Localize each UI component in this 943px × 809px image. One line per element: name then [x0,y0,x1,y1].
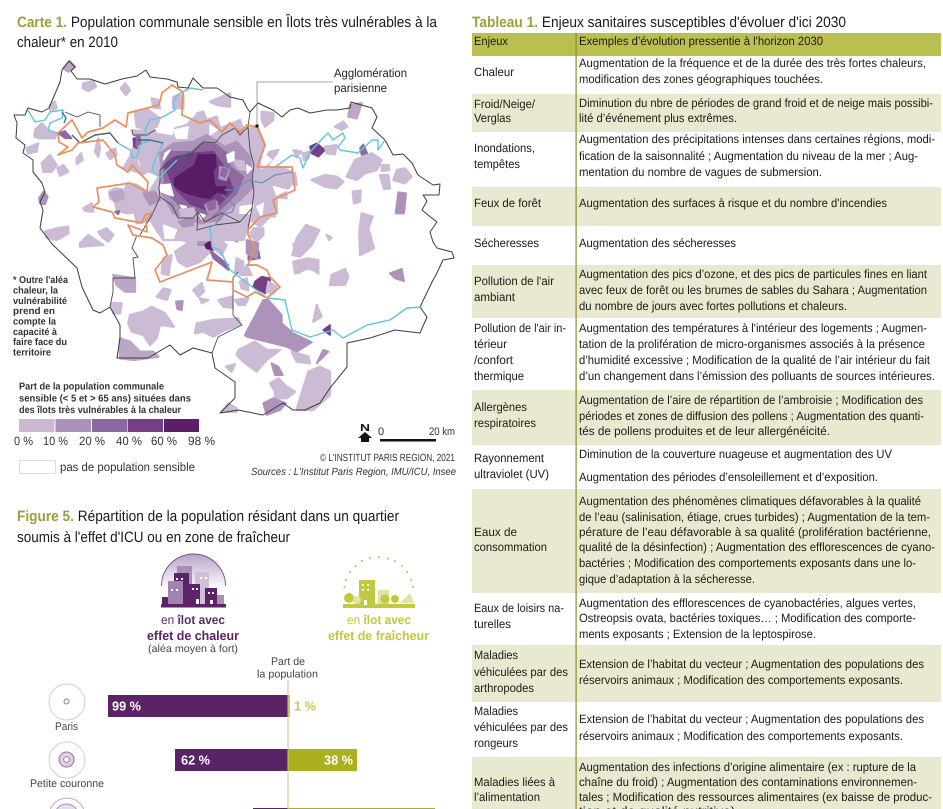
map: south communes [112,235,330,415]
row: Allergènes [474,393,924,438]
row: Petite couronne [30,742,357,790]
row: Paris [49,684,316,733]
source credit: Sources : L'Institut Paris Region, IMU/ICU, Insee [251,467,456,478]
row: Eaux de consommation: Augmentation des phénomènes climatiques défavorables à la qualité [579,494,921,508]
row: Pollution de l'air intérieur: térieur [474,337,507,351]
row: Maladies rongeurs [474,704,924,750]
row: Maladies arthropodes: véhiculées par des [474,665,568,679]
row: Chaleur [474,56,926,86]
row: Eaux de consommation: de l’eau (salinisation, étiage, crues turbides) ; Augmentation de la tem- [579,510,930,524]
row: Pollution de l'air intérieur: thermique [474,369,524,383]
row: Eaux de loisirs [474,596,916,641]
row: Maladies alimentation: l’alimentation [474,790,540,804]
row: Maladies arthropodes [474,648,924,695]
row: Froid: Froid/Neige/ [474,97,536,111]
map: Île-de-France vulnerability choropleth [14,61,454,415]
legend: choropleth classes: sensible (< 5 et > 65 ans) situées dans [19,394,191,404]
axis label: la population [257,668,318,680]
label: cool column: en îlot avec [347,613,411,627]
row: Maladies arthropodes: Extension de l’habitat du vecteur ; Augmentation des populations des [579,657,924,671]
row: Eaux de consommation: Eaux de [474,525,517,539]
row: Inondations [474,132,935,179]
footnote: vulnerability definition: * Outre l'aléa [13,275,68,286]
row: Chaleur: modification des zones géographiques touchées. [579,72,823,86]
row: Eaux de consommation: pérature de l’eau défavorable à sa qualité (prolifération bactérienne, [579,525,931,539]
row: Rayonnement UV: Diminution de la couverture nuageuse et augmentation des UV [579,447,892,461]
row: Pollution de l'air intérieur: /confort [474,353,514,367]
map: agglomeration leader and label [256,66,407,128]
map: agglomeration leader and label: parisienne [334,81,387,95]
footnote: vulnerability definition [13,275,68,358]
icon: north arrow and scale bar: N [360,423,370,434]
icon: heat city [161,554,226,608]
row: Pollution de l'air ambiant: du nombre de jours avec fortes pollutions et chaleurs. [579,299,847,313]
row: Allergènes: Augmentation de l’aire de répartition de l’ambroisie ; Modification des [579,393,923,407]
row: Sécheresses [474,236,736,250]
row: Maladies alimentation [474,760,932,809]
row: Maladies arthropodes: arthropodes [474,681,534,695]
row: Eaux de consommation: gique d’adaptation à la sécheresse. [579,572,755,586]
heading: Carte 1: chaleur* en 2010 [17,34,118,51]
table row backgrounds [472,33,941,809]
row: Pollution de l'air ambiant: Augmentation des pics d’ozone, et des pics de particules fines en liant [579,267,928,281]
footnote: vulnerability definition: territoire [13,348,52,358]
label: heat column: en îlot avec [161,613,225,627]
row: Eaux de loisirs: turelles [474,617,511,631]
table: Enjeux sanitaires [472,33,941,809]
row: Froid: lité d’événement plus extrêmes. [579,111,737,125]
map: agglomeration boundary [58,85,295,298]
row: Eaux de loisirs: Eaux de loisirs na- [474,601,564,615]
row: Petite couronne: 38 % [324,752,353,768]
legend: choropleth classes: 98 % [188,434,215,448]
row: Pollution de l'air ambiant: Pollution de l'air [474,274,554,288]
source credit: © L'INSTITUT PARIS REGION, 2021 [320,453,455,464]
row: Allergènes: respiratoires [474,416,536,430]
map: east communes [240,103,412,285]
icon: north arrow and scale bar: 20 km [429,426,455,438]
row: Pollution de l'air ambiant [474,267,928,313]
table header: Enjeux [474,34,508,48]
heading: Carte 1 [17,13,438,51]
footnote: vulnerability definition: prend en [13,306,55,317]
legend: choropleth classes [14,382,215,474]
row: Maladies alimentation: Augmentation des infections d’origine alimentaire (ex : rupture de la [579,760,916,774]
row: Eaux de consommation [474,494,935,586]
row: Rayonnement UV: ultraviolet (UV) [474,467,549,481]
legend: choropleth classes: 20 % [79,434,105,448]
axis label [257,656,318,680]
row: Pollution de l'air ambiant: avec feux de forêt ou les brumes de sables du Sahara ; Augmentation [579,283,927,297]
legend: choropleth classes: 10 % [43,434,68,448]
row: Maladies alimentation: tales ; Modification des ressources alimentaires (ex baisse de produc- [579,790,932,804]
source credit [251,453,456,478]
row: Paris: 1 % [294,698,316,714]
map: central communes around Paris [132,113,290,240]
legend: choropleth classes: 40 % [116,434,142,448]
row: Feux de forêt: Feux de forêt [474,196,542,210]
row: Petite couronne: Petite couronne [30,778,104,790]
map: rivers [28,88,422,338]
row: Sécheresses: Sécheresses [474,236,539,250]
row: Pollution de l'air intérieur: d’humidité excessive ; Modification de la qualité de l’air intérieur du fait [579,353,931,367]
chart: share of population bars [30,656,435,809]
row: Eaux de loisirs: ments exposants ; Extension de la leptospirose. [579,627,816,641]
row: Feux de forêt: Augmentation des surfaces à risque et du nombre d'incendies [579,196,887,210]
row: Rayonnement UV: Augmentation des périodes d’ensoleillement et d’exposition. [579,470,878,484]
row: Pollution de l'air intérieur: Pollution de l'air in- [474,321,566,335]
heading: Figure 5: Figure 5. Répartition de la population résidant dans un quartier [17,508,399,525]
row: Eaux de loisirs: Ostreopsis ovata, bactéries toxiques… ; Modification des comporte- [579,611,916,625]
footnote: vulnerability definition: capacité à [13,327,58,338]
footnote: vulnerability definition: compte la [13,316,57,328]
row: Inondations: tempêtes [474,157,520,171]
icon: north arrow and scale bar: 0 [378,426,384,438]
label: cool column [328,613,429,643]
row: Maladies alimentation: Maladies liées à [474,775,555,789]
row: Petite couronne: 62 % [181,752,210,768]
heading: Figure 5 [17,508,399,546]
row: Maladies rongeurs: véhiculées par des [474,720,568,734]
footnote: vulnerability definition: vulnérabilité [13,296,68,307]
icon: cool neighbourhood [343,556,415,608]
row: Maladies rongeurs: rongeurs [474,736,518,750]
legend: choropleth classes: Part de la population communale [19,382,164,392]
row: Eaux de loisirs: Augmentation des efflorescences de cyanobactéries, algues vertes, [579,596,916,610]
icon: north arrow and scale bar [358,423,455,442]
label: heat column [147,613,239,655]
row: Rayonnement UV [474,447,892,484]
row: Pollution de l'air intérieur: Augmentation des températures à l'intérieur des logements ; Augmen- [579,321,927,335]
table header: Exemples d’évolution pressentie à l'horizon 2030 [579,34,823,48]
row: Eaux de consommation: bactéries ; Modification des comportements exposants dans une lo- [579,556,916,570]
row: Inondations: mentation du nombre de vagues de submersion. [579,165,822,179]
row: Grande couronne (cropped) [49,798,435,809]
map: agglomeration leader and label: Agglomération [334,66,407,80]
label: heat column: (aléa moyen à fort) [148,643,238,655]
row: Paris: Paris [55,721,78,733]
row: Maladies rongeurs: Maladies [474,704,518,718]
legend: choropleth classes: des îlots très vulnérables à la chaleur [19,405,181,416]
row: Paris: 99 % [112,698,141,714]
row: Eaux de consommation: consommation [474,540,547,554]
row: Allergènes: tés de pollens produites et de leur allergénéicité. [579,424,830,438]
legend: choropleth classes: 0 % [14,434,33,448]
row: Maladies arthropodes: réservoirs animaux ; Modification des comportements exposants. [579,673,903,687]
row: Pollution de l'air intérieur [474,321,935,383]
legend: choropleth classes: 60 % [151,434,177,448]
row: Allergènes: Allergènes [474,400,527,414]
heading: Tableau 1: Tableau 1. Enjeux sanitaires susceptibles d'évoluer d'ici 2030 [472,14,846,31]
row: Pollution de l'air intérieur: tation de la prolifération de micro-organismes associés à la présence [579,337,925,351]
row: Maladies arthropodes: Maladies [474,648,518,662]
heading: Figure 5: soumis à l'effet d'ICU ou en zone de fraîcheur [17,529,290,546]
row: Inondations: Inondations, [474,141,535,155]
row: Maladies rongeurs: Extension de l’habitat du vecteur ; Augmentation des populations des [579,712,924,726]
row: Chaleur: Augmentation de la fréquence et de la durée des très fortes chaleurs, [579,56,926,70]
table header [474,34,823,48]
row: Maladies rongeurs: réservoirs animaux ; Modification des comportements exposants. [579,729,903,743]
map: west communes [27,61,230,247]
legend: choropleth classes: pas de population sensible [60,460,195,474]
map: region outline [14,61,454,415]
footnote: vulnerability definition: chaleur, la [13,286,59,296]
row: Allergènes: périodes et zones de diffusion des pollens ; Augmentation des quanti- [579,409,924,423]
map: department borders [65,112,254,353]
row: Froid: Verglas [474,111,511,125]
heading: Carte 1: Carte 1. Population communale sensible en Îlots très vulnérables à la [17,13,438,31]
axis label: Part de [271,656,305,668]
row: Inondations: fication de la saisonnalité ; Augmentation du niveau de la mer ; Aug- [579,149,918,163]
row: Rayonnement UV: Rayonnement [474,451,545,465]
label: cool column: effet de fraîcheur [328,628,429,643]
row: Chaleur: Chaleur [474,65,514,79]
row: Pollution de l'air ambiant: ambiant [474,290,516,304]
row: Maladies alimentation: chaîne du froid) ; Augmentation des contaminations environnemen- [579,775,917,789]
label: heat column: effet de chaleur [147,628,239,643]
row: Sécheresses: Augmentation des sécheresses [579,236,736,250]
footnote: vulnerability definition: faire face du [13,337,67,348]
row: Froid [474,96,933,125]
